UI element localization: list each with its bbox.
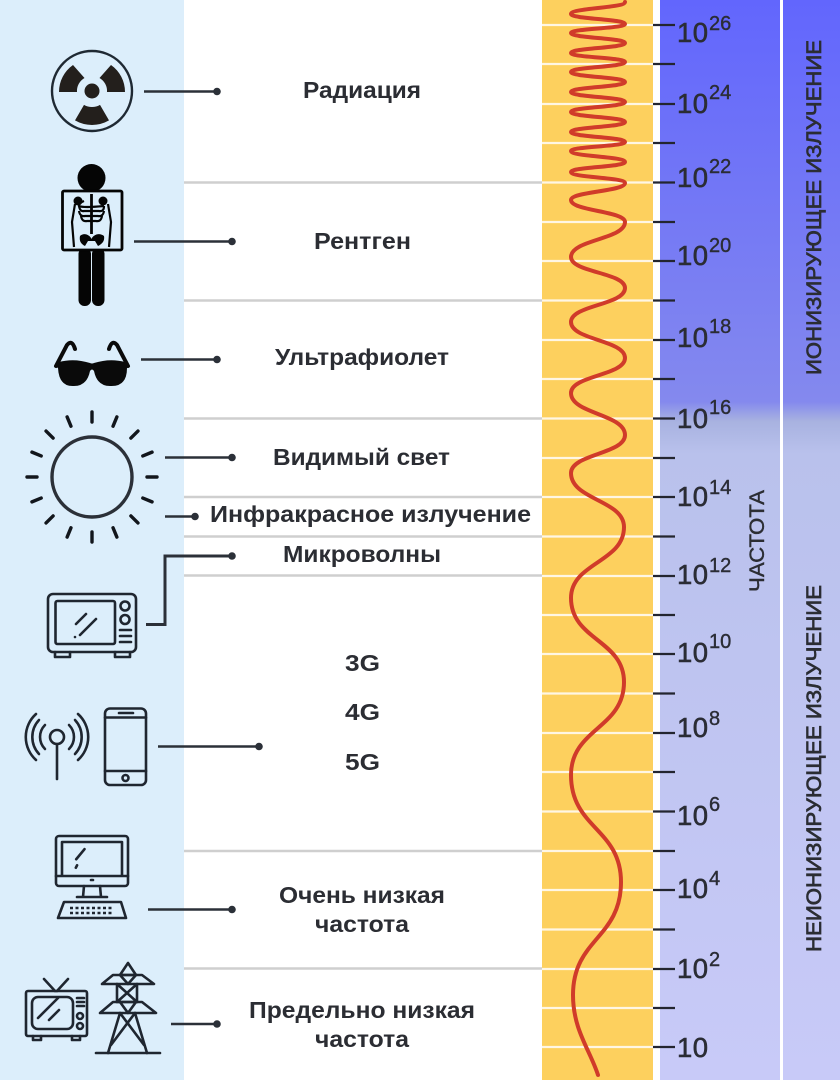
panel: radiation type band [783, 0, 840, 1080]
connector: infrared [165, 513, 199, 520]
frequency scale labels: 16 [709, 397, 731, 419]
panel: icon column [0, 0, 184, 1080]
frequency scale labels: 14 [709, 477, 731, 499]
frequency scale labels: 10 [677, 800, 708, 831]
frequency scale labels: 12 [709, 555, 731, 577]
icon: television [26, 979, 87, 1040]
connector: visible light [165, 454, 236, 461]
heading: x-ray: Рентген [314, 228, 411, 254]
frequency scale labels: 10 [677, 712, 708, 743]
connector: radiation [144, 88, 221, 95]
heading: extremely low frequency: частота [315, 1026, 409, 1052]
heading: very low frequency [279, 882, 445, 937]
icon: power pylon [96, 963, 160, 1053]
heading: infrared: Инфракрасное излучение [210, 501, 531, 527]
panel: frequency band [660, 0, 780, 1080]
connector: very low frequency [148, 906, 236, 913]
axis label: frequency: ЧАСТОТА [746, 490, 769, 592]
heading: mobile generations: 3G [345, 650, 380, 676]
panel: wave band [542, 0, 653, 1080]
frequency scale labels: 10 [709, 631, 731, 653]
frequency scale labels: 10 [677, 88, 708, 119]
heading: microwaves: Микроволны [283, 541, 441, 567]
frequency scale labels: 24 [709, 82, 731, 104]
frequency scale labels: 10 [677, 637, 708, 668]
label: ionizing radiation: ИОНИЗИРУЮЩЕЕ ИЗЛУЧЕНИЕ [803, 40, 826, 375]
frequency scale labels: 10 [677, 403, 708, 434]
frequency scale labels: 20 [709, 235, 731, 257]
icon: x-ray person [62, 164, 122, 306]
heading: mobile generations [345, 650, 380, 775]
icon: radiation symbol [52, 51, 132, 131]
frequency scale labels: 8 [709, 708, 720, 730]
frequency scale labels: 10 [677, 322, 708, 353]
icon: smartphone [105, 708, 146, 785]
frequency scale labels: 10 [677, 1032, 708, 1063]
heading: ultraviolet: Ультрафиолет [275, 344, 449, 370]
frequency scale labels: 10 [677, 240, 708, 271]
icon: microwave [48, 594, 136, 657]
frequency scale labels: 10 [677, 481, 708, 512]
icon: antenna [26, 714, 88, 779]
frequency scale labels: 2 [709, 949, 720, 971]
connector: extremely low frequency [171, 1020, 221, 1028]
heading: mobile generations: 4G [345, 699, 380, 725]
heading: mobile generations: 5G [345, 749, 380, 775]
heading: very low frequency: Очень низкая [279, 882, 445, 908]
frequency scale labels: 10 [677, 559, 708, 590]
label: non-ionizing radiation: НЕИОНИЗИРУЮЩЕЕ ИЗЛУЧЕНИЕ [803, 585, 826, 952]
frequency scale labels: 10 [677, 162, 708, 193]
connector: mobile [158, 743, 263, 750]
frequency scale labels: 6 [709, 794, 720, 816]
icon: desktop computer [56, 836, 128, 918]
connector: x-ray [134, 238, 236, 245]
connector: ultraviolet [141, 356, 221, 363]
icon: sun [27, 412, 157, 542]
heading: visible light: Видимый свет [273, 444, 450, 470]
heading: extremely low frequency: Предельно низкая [249, 997, 475, 1023]
frequency scale labels: 4 [709, 868, 720, 890]
frequency scale labels: 10 [677, 873, 708, 904]
wave: frequency increasing upward [571, 2, 625, 1075]
heading: very low frequency: частота [315, 911, 409, 937]
frequency scale labels: 18 [709, 316, 731, 338]
frequency scale labels: 10 [677, 17, 708, 48]
frequency scale labels: 22 [709, 156, 731, 178]
frequency scale labels: 26 [709, 13, 731, 35]
frequency tick marks [653, 25, 675, 1047]
heading: radiation: Радиация [303, 77, 421, 103]
heading: extremely low frequency [249, 997, 475, 1052]
frequency scale labels: 10 [677, 953, 708, 984]
frequency scale labels [677, 13, 731, 1063]
icon: sunglasses [55, 343, 129, 386]
connector: microwaves [146, 552, 236, 624]
